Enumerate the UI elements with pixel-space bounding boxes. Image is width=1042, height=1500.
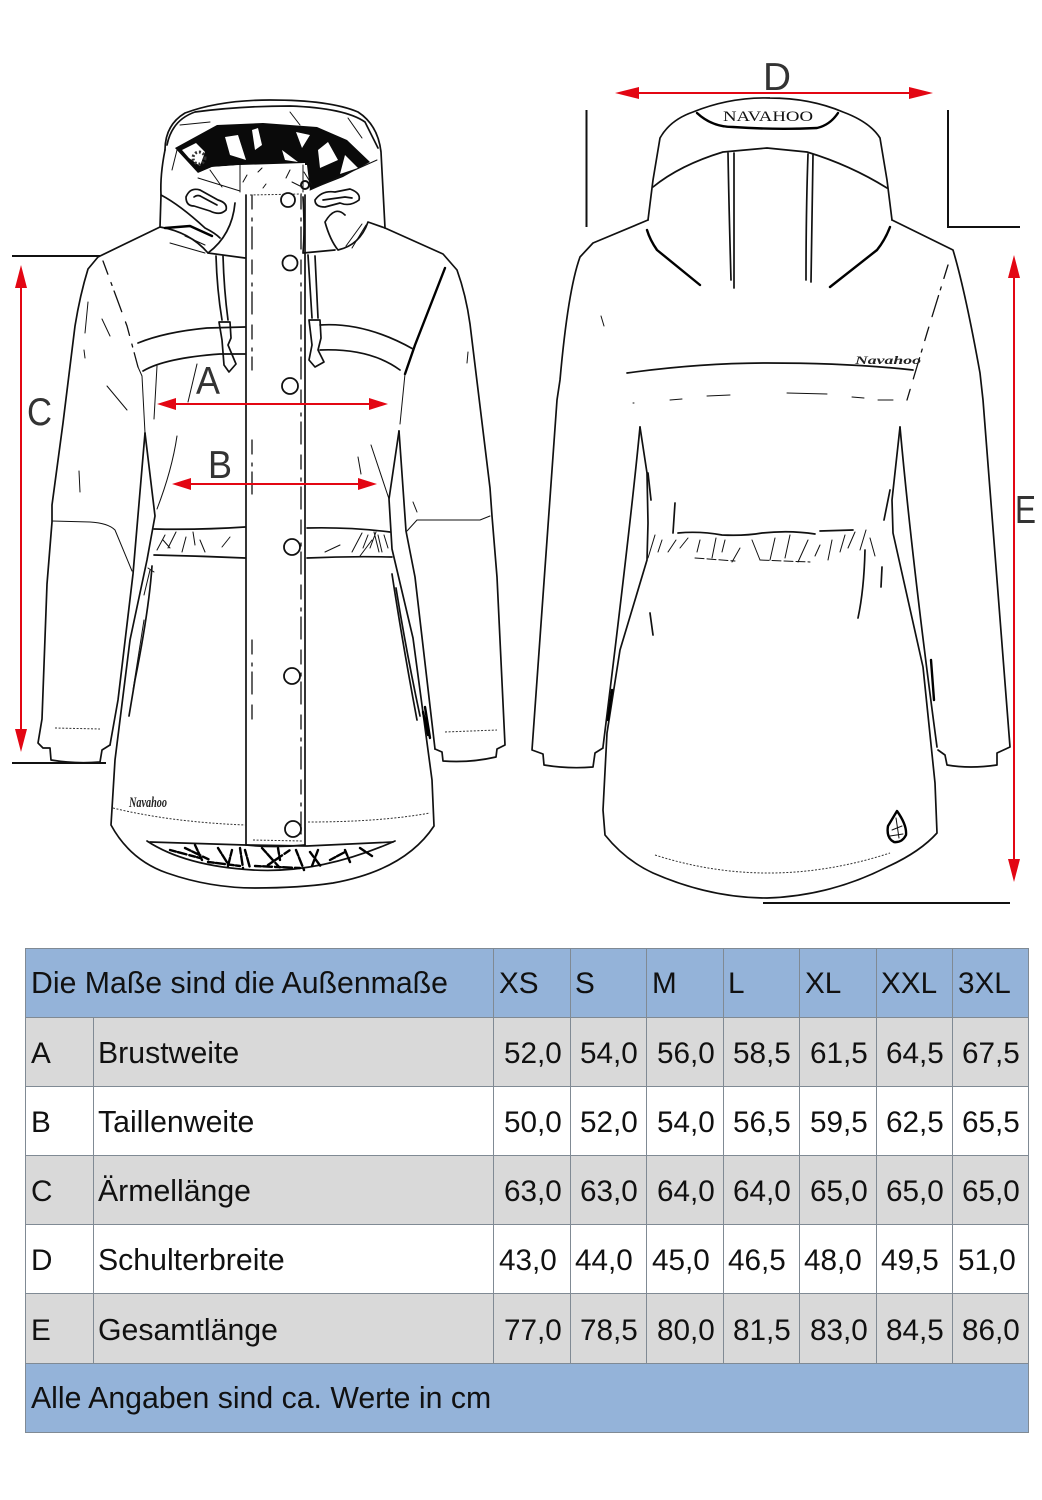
table row backgrounds — [26, 948, 1028, 1432]
row C sleeve length: 65,0 — [810, 1175, 868, 1208]
row B waist width: 54,0 — [657, 1106, 715, 1139]
front view jacket drawing — [38, 100, 505, 888]
front snap buttons — [281, 193, 301, 837]
row D shoulder width: 46,5 — [728, 1244, 786, 1277]
row A chest width: 56,0 — [657, 1037, 715, 1070]
row A chest width: 54,0 — [580, 1037, 638, 1070]
row C sleeve length: 65,0 — [886, 1175, 944, 1208]
back view jacket drawing — [532, 98, 1010, 898]
table header row: Die Maße sind die Außenmaße — [31, 967, 448, 1000]
row D shoulder width: 43,0 — [499, 1244, 557, 1277]
arrow E total length — [1008, 255, 1020, 882]
label D: D — [763, 56, 791, 99]
table header row: M — [652, 967, 677, 1000]
row B waist width: 62,5 — [886, 1106, 944, 1139]
arrow A chest width — [157, 398, 388, 410]
label E: E — [1015, 489, 1036, 532]
front right sleeve — [385, 228, 505, 762]
row C sleeve length: Ärmellänge — [98, 1175, 251, 1208]
label A: A — [196, 360, 220, 403]
front side pockets — [129, 566, 430, 738]
row B waist width: 52,0 — [580, 1106, 638, 1139]
row E total length: 84,5 — [886, 1314, 944, 1347]
row D shoulder width: 51,0 — [958, 1244, 1016, 1277]
row E total length: 80,0 — [657, 1314, 715, 1347]
row C sleeve length — [31, 1175, 1020, 1208]
front body outline and hem — [111, 364, 434, 888]
row A chest width — [31, 1037, 1020, 1070]
row E total length: 83,0 — [810, 1314, 868, 1347]
size table — [26, 948, 1028, 1432]
front waist drawstring band — [154, 527, 392, 558]
back side seam detail — [608, 660, 934, 720]
row D shoulder width: D — [31, 1244, 52, 1277]
row E total length — [31, 1314, 1020, 1347]
front hood lining print — [172, 112, 377, 192]
row D shoulder width: 44,0 — [575, 1244, 633, 1277]
left hood cord and toggle — [216, 256, 236, 372]
back hood — [647, 98, 892, 288]
row C sleeve length: 64,0 — [733, 1175, 791, 1208]
hood eyelet left — [186, 189, 226, 213]
table header row: XL — [805, 967, 841, 1000]
row E total length: 77,0 — [504, 1314, 562, 1347]
row D shoulder width: 45,0 — [652, 1244, 710, 1277]
label C: C — [27, 391, 52, 434]
back script logo: Navahoo — [854, 353, 921, 367]
row A chest width: A — [31, 1037, 51, 1070]
back patch logo — [888, 811, 906, 842]
row D shoulder width — [31, 1244, 1016, 1277]
table header row: XXL — [881, 967, 937, 1000]
row A chest width: Brustweite — [98, 1037, 239, 1070]
row E total length: 78,5 — [580, 1314, 638, 1347]
table header row: L — [728, 967, 745, 1000]
table header row — [31, 967, 1011, 1000]
arrow C sleeve length — [15, 265, 27, 752]
row A chest width: 64,5 — [886, 1037, 944, 1070]
row E total length: 81,5 — [733, 1314, 791, 1347]
arrow B waist width — [172, 478, 377, 490]
label B: B — [208, 444, 232, 487]
row B waist width: B — [31, 1106, 51, 1139]
front hood outer shell — [160, 100, 385, 258]
front chest yoke seam — [138, 325, 413, 371]
back waist band — [648, 473, 890, 635]
row E total length: 86,0 — [962, 1314, 1020, 1347]
row D shoulder width: 49,5 — [881, 1244, 939, 1277]
arrow D shoulder width — [615, 87, 933, 99]
right hood cord and toggle — [308, 255, 324, 367]
table header row: 3XL — [958, 967, 1011, 1000]
row B waist width: 59,5 — [810, 1106, 868, 1139]
back body outline and hem — [603, 427, 937, 898]
row E total length: Gesamtlänge — [98, 1314, 278, 1347]
back sleeves — [532, 220, 1010, 768]
row A chest width: 58,5 — [733, 1037, 791, 1070]
row E total length: E — [31, 1314, 51, 1347]
row C sleeve length: 65,0 — [962, 1175, 1020, 1208]
row B waist width: 50,0 — [504, 1106, 562, 1139]
table footer note: Alle Angaben sind ca. Werte in cm — [31, 1382, 491, 1415]
row C sleeve length: C — [31, 1175, 52, 1208]
row C sleeve length: 64,0 — [657, 1175, 715, 1208]
row A chest width: 52,0 — [504, 1037, 562, 1070]
row D shoulder width: Schulterbreite — [98, 1244, 285, 1277]
front left sleeve — [38, 227, 160, 763]
hood eyelet right — [315, 189, 359, 207]
row B waist width — [31, 1106, 1020, 1139]
measurement reference lines — [12, 110, 1020, 903]
back yoke seam — [601, 265, 948, 403]
row A chest width: 61,5 — [810, 1037, 868, 1070]
row A chest width: 67,5 — [962, 1037, 1020, 1070]
front script logo: Navahoo — [128, 795, 167, 811]
table header row: XS — [499, 967, 539, 1000]
row B waist width: 65,5 — [962, 1106, 1020, 1139]
back hood label NAVAHOO: NAVAHOO — [723, 109, 813, 125]
table header row: S — [575, 967, 595, 1000]
front hem lining print — [147, 841, 395, 870]
row D shoulder width: 48,0 — [804, 1244, 862, 1277]
row B waist width: 56,5 — [733, 1106, 791, 1139]
row C sleeve length: 63,0 — [580, 1175, 638, 1208]
row C sleeve length: 63,0 — [504, 1175, 562, 1208]
row B waist width: Taillenweite — [98, 1106, 254, 1139]
front placket — [246, 194, 305, 846]
